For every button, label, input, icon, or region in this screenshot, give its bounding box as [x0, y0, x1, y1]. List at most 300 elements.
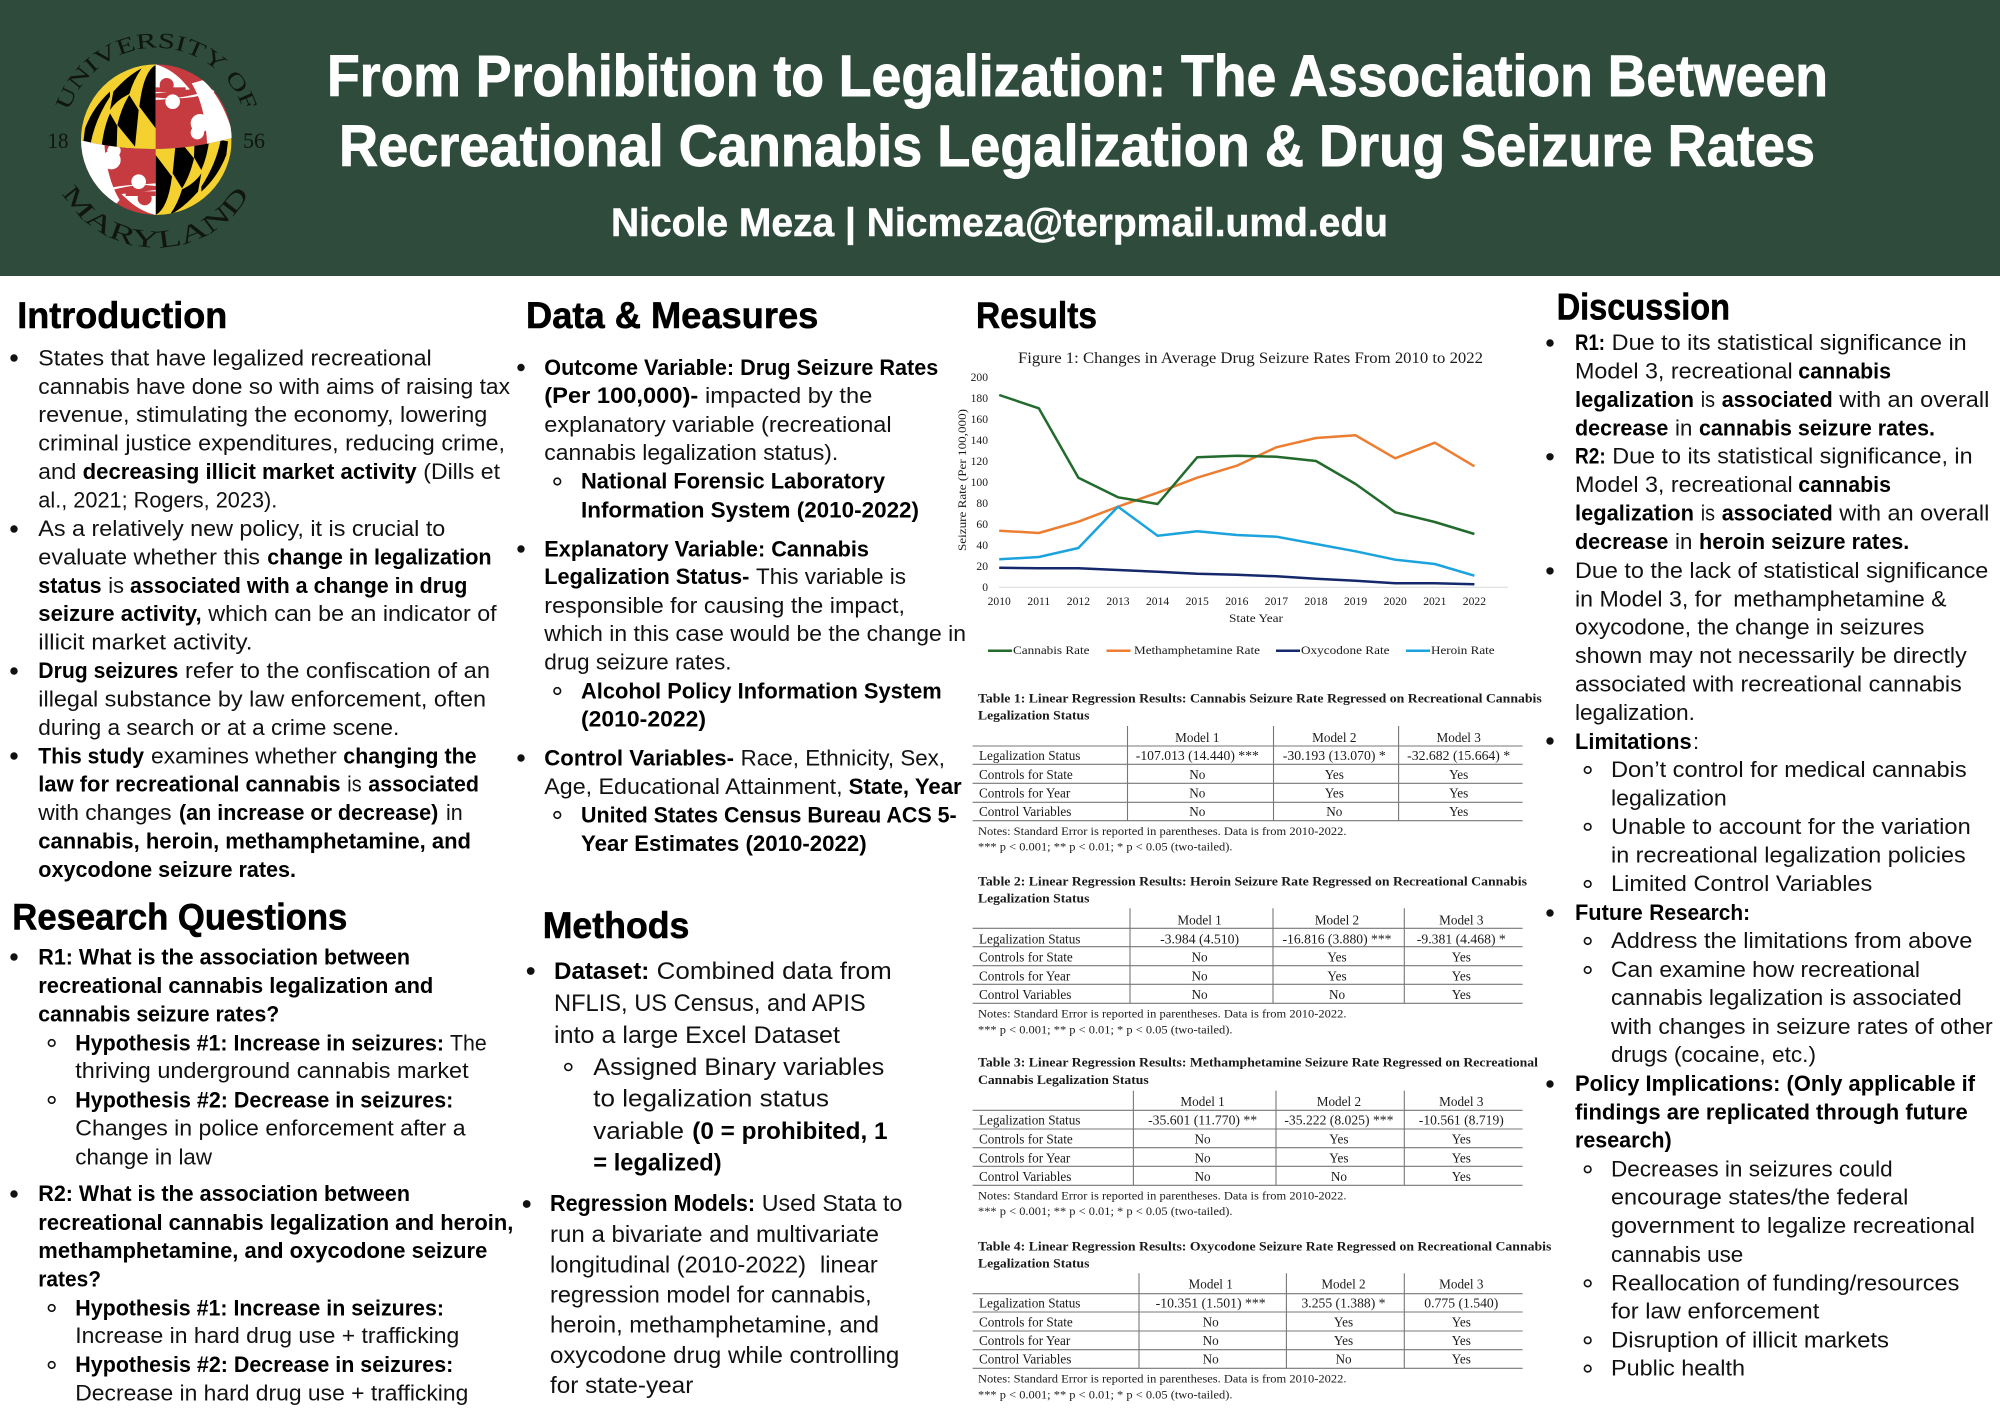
y axis labels [971, 371, 988, 594]
bullet: this study: changing the [343, 743, 477, 768]
bullet: drug seizures definition [10, 658, 490, 740]
table 2: heroin regression: Yes [1327, 969, 1347, 984]
bullet: drug seizures definition: during a search or at a crime scene. [38, 715, 399, 740]
bullet: R2 finding: in [1675, 529, 1692, 554]
bullet: R2 finding: legalization [1575, 501, 1694, 526]
table 4: oxycodone regression: Yes [1452, 1333, 1471, 1348]
line chart: Figure 1 [955, 350, 1508, 657]
bullet: R2 finding: heroin seizure rates. [1699, 529, 1909, 554]
question: R2: Hypothesis #1: Increase in seizures: [75, 1295, 444, 1320]
bullet: outcome variable: National Forensic Laboratory [581, 469, 886, 494]
y axis title: Seizure Rate (Per 100,000) [955, 409, 969, 551]
table 4: oxycodone regression: No [1203, 1314, 1219, 1329]
x axis labels: 2022 [1463, 595, 1486, 608]
bullet: dataset: Combined data from [657, 958, 892, 985]
bullet: non-significant results: oxycodone, the change in seizures [1575, 615, 1924, 640]
bullet: policy implications: research) [1575, 1127, 1672, 1152]
question: R1: Hypothesis #1: Increase in seizures: [75, 1030, 444, 1055]
x axis labels: 2019 [1344, 595, 1367, 608]
question: R1 [10, 944, 487, 1169]
bullet: future research: Future [1575, 900, 1643, 925]
legend: Cannabis Rate [1013, 643, 1090, 657]
bullet: regression models [523, 1190, 902, 1398]
panel: discussion [1546, 286, 1993, 1381]
table 2: heroin regression: Model 1 [1177, 912, 1222, 927]
bullet: policy implications: findings are replicated through future [1575, 1099, 1968, 1124]
series: heroin [999, 507, 1474, 576]
legend: Methamphetamine Rate [1134, 643, 1260, 657]
bullet: explanatory variable: responsible for causing the impact, [544, 593, 905, 618]
table 3: methamphetamine regression: Yes [1452, 1132, 1471, 1147]
bullet: R1 finding: Due to its statistical significance in [1612, 330, 1967, 355]
bullet: regression models: Used Stata to [762, 1190, 902, 1216]
bullet: R1 finding: associated [1722, 387, 1833, 412]
panel: introduction [10, 295, 510, 882]
table 2: heroin regression: Model 3 [1439, 912, 1484, 927]
table 3: methamphetamine regression: Controls for Year [979, 1151, 1071, 1166]
question: R1: change in law [75, 1144, 212, 1169]
bullet: outcome variable: Information System (2010-2022) [581, 497, 919, 522]
table 3: methamphetamine regression: No [1331, 1169, 1347, 1184]
table 1: cannabis regression: No [1189, 785, 1206, 800]
bullet: regression models: for state-year [550, 1372, 693, 1398]
question: R2: R2: What is the association between [38, 1181, 410, 1206]
bullet: dataset: NFLIS, US Census, and APIS [554, 990, 866, 1017]
bullet: legalization aims: (Dills et [423, 459, 500, 484]
bullet: control variables: United States Census Bureau ACS 5- [581, 802, 957, 827]
icon: University of Maryland seal: MARYLAND [62, 184, 246, 248]
bullet: future research: cannabis legalization is associated [1611, 985, 1962, 1010]
bullet: future research: drugs (cocaine, etc.) [1611, 1042, 1816, 1067]
table 2: heroin regression: Notes: Standard Error is reported in parentheses. Data is from 2010-2022. [978, 1008, 1347, 1021]
table 1: cannabis regression: No [1189, 767, 1206, 782]
bullet: explanatory variable: Explanatory Variable: Cannabis [544, 536, 869, 561]
bullet: outcome variable: Outcome Variable: Drug Seizure Rates [544, 355, 938, 380]
table 2: heroin regression [973, 875, 1527, 1036]
y axis labels: 40 [976, 539, 988, 552]
bullet: R1 finding: decrease [1575, 415, 1668, 440]
bullet: non-significant results: in Model 3, for [1575, 586, 1722, 611]
table 4: oxycodone regression [973, 1239, 1552, 1401]
bullet: this study: in [446, 800, 463, 825]
table 1: cannabis regression [973, 692, 1542, 854]
bullet: regression models: longitudinal (2010-2022) [550, 1251, 806, 1277]
table 4: oxycodone regression: -10.351 (1.501) *** [1156, 1296, 1266, 1311]
panel: research questions [10, 896, 513, 1405]
table 2: heroin regression: No [1192, 987, 1208, 1002]
panel: methods [523, 905, 902, 1398]
bullet: R2 finding: Due to its statistical significance, in [1612, 444, 1973, 469]
header banner [0, 0, 2000, 276]
x axis labels: 2021 [1423, 595, 1447, 608]
bullet: policy implications: cannabis use [1611, 1242, 1743, 1267]
x axis labels: 2016 [1225, 595, 1249, 608]
bullet: control variables: State, Year [849, 774, 962, 799]
table 4: oxycodone regression: Legalization Status [979, 1296, 1080, 1311]
table 1: cannabis regression: Legalization Status [978, 708, 1090, 722]
question: R2: methamphetamine, and oxycodone seizure [38, 1238, 487, 1263]
table 1: cannabis regression: Yes [1449, 804, 1468, 819]
legend [988, 643, 1495, 657]
bullet: R2 finding: cannabis [1798, 472, 1891, 497]
bullet: outcome variable: cannabis legalization status). [544, 440, 838, 465]
bullet: explanatory variable: (2010-2022) [581, 707, 706, 732]
question: R2: Increase in hard drug use + trafficking [75, 1323, 459, 1348]
table 3: methamphetamine regression: Model 3 [1439, 1094, 1484, 1109]
bullet: limitations: Don’t control for medical cannabis [1611, 757, 1967, 782]
bullet: dataset: into a large Excel Dataset [554, 1022, 840, 1049]
question: R2: rates? [38, 1266, 101, 1291]
bullet: limitations: in recreational legalization policies [1611, 842, 1966, 867]
icon: University of Maryland seal: UNIVERSITY OF [56, 34, 257, 107]
bullet: R1 finding: with an overall [1838, 387, 1989, 412]
table 3: methamphetamine regression: *** p < 0.001; ** p < 0.01; * p < 0.05 (two-tailed). [978, 1205, 1233, 1218]
x axis labels [988, 595, 1486, 608]
table 2: heroin regression: Table 2: Linear Regression Results: Heroin Seizure Rate Regressed on Recreational Cannabis [978, 875, 1527, 889]
bullet: R1 finding: in [1675, 415, 1692, 440]
bullet: control variables: Control Variables- [544, 745, 734, 770]
bullet: why evaluate: status [38, 573, 102, 598]
bullet: control variables: Age, Educational Attainment, [544, 774, 843, 799]
bullet: why evaluate: evaluate whether this [38, 544, 260, 569]
table 3: methamphetamine regression: Model 1 [1180, 1094, 1225, 1109]
y axis labels: 100 [971, 476, 988, 489]
bullet: R2 finding: associated [1722, 501, 1833, 526]
bullet: regression models: Regression Models: [550, 1190, 755, 1216]
bullet: non-significant results: Due to the lack of statistical significance [1575, 558, 1988, 583]
bullet: policy implications: Disruption of illicit markets [1611, 1327, 1889, 1352]
table 1: cannabis regression: Controls for State [979, 767, 1073, 782]
question: R2 [10, 1181, 513, 1405]
chart title: Figure 1: Changes in Average Drug Seizure Rates From 2010 to 2022 [1018, 350, 1483, 367]
bullet: R1 finding: legalization [1575, 387, 1694, 412]
table 2: heroin regression: *** p < 0.001; ** p < 0.01; * p < 0.05 (two-tailed). [978, 1023, 1233, 1036]
title: From Prohibition to Legalization: The Association Between [327, 44, 1828, 109]
bullet: explanatory variable: This variable is [756, 564, 906, 589]
table 3: methamphetamine regression: Cannabis Legalization Status [978, 1073, 1149, 1087]
table 4: oxycodone regression: Control Variables [979, 1352, 1071, 1367]
bullet: legalization aims: al., 2021; Rogers, 2023). [38, 488, 277, 512]
table 4: oxycodone regression: Yes [1334, 1314, 1353, 1329]
table 4: oxycodone regression: Controls for State [979, 1314, 1073, 1329]
y axis labels: 180 [971, 392, 988, 405]
bullet: R2 finding: is [1701, 501, 1715, 526]
heading: Introduction: Introduction [17, 295, 227, 336]
question: R2: Hypothesis #2: Decrease in seizures: [75, 1352, 453, 1377]
bullet: dataset: variable [593, 1118, 684, 1145]
table 1: cannabis regression: Control Variables [979, 804, 1071, 819]
bullet: why evaluate: illicit market activity. [38, 630, 253, 655]
bullet: this study: law for recreational cannabis [38, 772, 341, 797]
question: R1: The [450, 1030, 487, 1055]
bullet: future research: Address the limitations from above [1611, 928, 1972, 953]
bullet: dataset: Assigned Binary variables [593, 1054, 884, 1081]
bullet: R2 finding: R2: [1575, 444, 1606, 469]
table 2: heroin regression: Yes [1327, 950, 1347, 965]
table 1: cannabis regression: Notes: Standard Error is reported in parentheses. Data is from 2010-2022. [978, 825, 1347, 838]
table 1: cannabis regression: Yes [1449, 785, 1468, 800]
bullet: this study: is [347, 772, 362, 797]
bullet: non-significant results: associated with recreational cannabis [1575, 672, 1962, 697]
legend: Heroin Rate [1431, 643, 1495, 657]
y axis labels: 60 [976, 518, 988, 531]
bullet: dataset [527, 958, 892, 1176]
bullet: explanatory variable: Legalization Status- [544, 564, 749, 589]
question: R2: recreational cannabis legalization and heroin, [38, 1210, 513, 1235]
table 2: heroin regression: Controls for State [979, 950, 1073, 965]
bullet: outcome variable: (Per 100,000)- [544, 383, 698, 408]
bullet: outcome variable: explanatory variable (recreational [544, 412, 892, 437]
bullet: non-significant results [1546, 558, 1988, 725]
table 2: heroin regression: Model 2 [1315, 912, 1359, 927]
series: oxycodone [999, 568, 1474, 584]
bullet: future research: Can examine how recreational [1611, 957, 1920, 982]
icon: University of Maryland seal: 56 [243, 128, 265, 153]
icon: University of Maryland seal [48, 34, 265, 248]
bullet: legalization aims: cannabis have done so with aims of raising tax [38, 374, 510, 399]
y axis labels: 200 [971, 371, 988, 384]
bullet: legalization aims: States that have legalized recreational [38, 345, 432, 370]
table 3: methamphetamine regression: Legalization Status [979, 1113, 1080, 1128]
bullet: limitations: legalization [1611, 785, 1727, 810]
bullet: regression models: regression model for cannabis, [550, 1281, 872, 1307]
legend: Oxycodone Rate [1301, 643, 1390, 657]
bullet: this study: oxycodone seizure rates. [38, 857, 296, 882]
table 3: methamphetamine regression: Table 3: Linear Regression Results: Methamphetamine Seizure Rate Regressed on Recreational [978, 1056, 1539, 1070]
table 1: cannabis regression: No [1326, 804, 1343, 819]
bullet: policy implications: encourage states/the federal [1611, 1185, 1908, 1210]
x axis labels: 2015 [1186, 595, 1209, 608]
question: R1: recreational cannabis legalization and [38, 973, 433, 998]
table 4: oxycodone regression: Legalization Status [978, 1256, 1090, 1270]
table 3: methamphetamine regression: Notes: Standard Error is reported in parentheses. Data is from 2010-2022. [978, 1189, 1347, 1202]
y axis labels: 0 [982, 581, 988, 594]
table 1: cannabis regression: Yes [1449, 767, 1468, 782]
bullet: legalization aims: criminal justice expenditures, reducing crime, [38, 431, 505, 456]
bullet: drug seizures definition: illegal substance by law enforcement, often [38, 686, 486, 711]
bullet: this study: This study [38, 743, 145, 768]
table 3: methamphetamine regression: Yes [1452, 1169, 1471, 1184]
bullet: R2 finding [1546, 444, 1989, 554]
table 2: heroin regression: -3.984 (4.510) [1160, 931, 1239, 946]
y axis labels: 20 [976, 560, 988, 573]
bullet: legalization aims: revenue, stimulating the economy, lowering [38, 402, 487, 427]
x axis title: State Year [1229, 611, 1283, 625]
x axis labels: 2020 [1384, 595, 1407, 608]
bullet: regression models: oxycodone drug while controlling [550, 1342, 899, 1368]
bullet: this study: (an increase or decrease) [179, 800, 438, 825]
table 3: methamphetamine regression: Yes [1452, 1151, 1471, 1166]
table 4: oxycodone regression: No [1203, 1333, 1219, 1348]
table 2: heroin regression: -16.816 (3.880) *** [1282, 931, 1392, 946]
bullet: why evaluate: associated with a change in drug [130, 573, 467, 598]
bullet: R2 finding: with an overall [1838, 501, 1989, 526]
bullet: non-significant results: shown may not necessarily be directly [1575, 643, 1967, 668]
bullet: policy implications: Public health [1611, 1356, 1745, 1381]
bullet: drug seizures definition: refer to the confiscation of an [185, 658, 490, 683]
x axis labels: 2018 [1304, 595, 1328, 608]
bullet: dataset: to legalization status [593, 1086, 829, 1112]
table 2: heroin regression: Legalization Status [978, 891, 1090, 905]
table 1: cannabis regression: -30.193 (13.070) * [1283, 748, 1386, 763]
y axis labels: 80 [976, 497, 988, 510]
heading: Discussion: Discussion [1557, 286, 1730, 328]
bullet: future research [1546, 900, 1993, 1067]
heading: Research Questions: Research Questions [12, 896, 347, 937]
bullet: policy implications: for law enforcement [1611, 1299, 1819, 1324]
table 4: oxycodone regression: Notes: Standard Error is reported in parentheses. Data is from 2010-2022. [978, 1372, 1347, 1385]
bullet: policy implications [1546, 1071, 1976, 1381]
x axis labels: 2010 [988, 595, 1011, 608]
bullet: policy implications: Reallocation of funding/resources [1611, 1270, 1959, 1295]
title [327, 44, 1828, 179]
table 3: methamphetamine regression: No [1195, 1132, 1211, 1147]
bullet: this study: with changes [37, 800, 172, 825]
table 3: methamphetamine regression: Control Variables [979, 1169, 1071, 1184]
bullet: non-significant results: legalization. [1575, 700, 1695, 725]
table 4: oxycodone regression: Model 2 [1321, 1276, 1366, 1291]
table 4: oxycodone regression: Yes [1452, 1314, 1471, 1329]
heading: Methods: Methods [543, 905, 689, 946]
bullet: regression models: heroin, methamphetamine, and [550, 1311, 879, 1337]
question: R1: R1: What is the association between [38, 944, 410, 970]
title: Recreational Cannabis Legalization & Drug Seizure Rates [339, 114, 1815, 179]
bullet: limitations: Limited Control Variables [1611, 871, 1872, 896]
table 4: oxycodone regression: *** p < 0.001; ** p < 0.01; * p < 0.05 (two-tailed). [978, 1388, 1233, 1401]
table 3: methamphetamine regression: -35.601 (11.770) ** [1148, 1113, 1257, 1128]
bullet: control variables: Year Estimates (2010-2022) [581, 831, 867, 856]
bullet: explanatory variable: drug seizure rates. [544, 650, 732, 675]
table 4: oxycodone regression: Table 4: Linear Regression Results: Oxycodone Seizure Rate Regressed on Recreational Cannabis [978, 1239, 1552, 1253]
table 1: cannabis regression: Model 2 [1312, 730, 1356, 745]
table 1: cannabis regression: -107.013 (14.440) *** [1136, 748, 1259, 763]
bullet: non-significant results: methamphetamine & [1733, 586, 1947, 611]
bullet: policy implications: Policy Implications: (Only applicable if [1575, 1071, 1976, 1096]
bullet: future research: Research: [1649, 900, 1750, 925]
bullet: R2 finding: Model 3, recreational [1575, 472, 1793, 497]
series: methamphetamine [999, 435, 1474, 533]
bullet: legalization aims: decreasing illicit market activity [83, 459, 417, 484]
table 4: oxycodone regression: 0.775 (1.540) [1424, 1296, 1498, 1311]
bullet: explanatory variable: Alcohol Policy Information System [581, 678, 942, 703]
bullet: R1 finding [1546, 330, 1989, 440]
table 2: heroin regression: Yes [1452, 950, 1471, 965]
bullet: explanatory variable: which in this case would be the change in [543, 621, 966, 646]
table 1: cannabis regression: Legalization Status [979, 748, 1080, 763]
table 1: cannabis regression: Controls for Year [979, 785, 1071, 800]
table 2: heroin regression: No [1329, 987, 1345, 1002]
table 4: oxycodone regression: Yes [1334, 1333, 1353, 1348]
bullet: why evaluate: which can be an indicator of [207, 601, 498, 626]
x axis labels: 2011 [1027, 595, 1050, 608]
bullet: legalization aims [10, 345, 510, 512]
question: R2: Decrease in hard drug use + trafficking [75, 1380, 468, 1405]
author and email: Nicole Meza | Nicmeza@terpmail.umd.edu [611, 201, 1388, 245]
bullet: why evaluate: As a relatively new policy, it is crucial to [38, 516, 445, 541]
table 1: cannabis regression: Table 1: Linear Regression Results: Cannabis Seizure Rate Regressed on Recreational Cannabis [978, 692, 1542, 706]
table 4: oxycodone regression: Yes [1452, 1352, 1471, 1367]
x axis labels: 2013 [1106, 595, 1130, 608]
table 1: cannabis regression: No [1189, 804, 1206, 819]
bullet: policy implications: Decreases in seizures could [1611, 1156, 1893, 1181]
table 1: cannabis regression: *** p < 0.001; ** p < 0.01; * p < 0.05 (two-tailed). [978, 841, 1233, 854]
bullet: outcome variable: impacted by the [705, 383, 872, 408]
bullet: R1 finding: R1: [1575, 330, 1605, 355]
bullet: why evaluate [10, 516, 498, 655]
table 2: heroin regression: Yes [1452, 969, 1471, 984]
bullet: drug seizures definition: Drug seizures [38, 658, 178, 683]
table 2: heroin regression: No [1192, 969, 1208, 984]
table 1: cannabis regression: -32.682 (15.664) * [1407, 748, 1510, 763]
bullet: limitations: Limitations [1575, 729, 1692, 754]
bullet: dataset: = legalized) [593, 1150, 722, 1176]
table 3: methamphetamine regression: -10.561 (8.719) [1419, 1113, 1504, 1128]
question: R1: Changes in police enforcement after a [75, 1115, 466, 1140]
table 1: cannabis regression: Model 3 [1437, 730, 1481, 745]
panel: results [955, 295, 1552, 1401]
panel: data and measures [517, 295, 966, 856]
bullet: R1 finding: Model 3, recreational [1575, 358, 1793, 383]
table 1: cannabis regression: Yes [1325, 785, 1344, 800]
table 3: methamphetamine regression: -35.222 (8.025) *** [1284, 1113, 1393, 1128]
bullet: this study [10, 743, 479, 882]
table 4: oxycodone regression: Model 3 [1439, 1276, 1484, 1291]
bullet: future research: with changes in seizure rates of other [1610, 1014, 1993, 1039]
bullet: R1 finding: cannabis seizure rates. [1699, 415, 1935, 440]
y axis labels: 160 [971, 413, 988, 426]
table 4: oxycodone regression: No [1335, 1352, 1352, 1367]
bullet: limitations: : [1693, 729, 1699, 754]
question: R1: thriving underground cannabis market [75, 1058, 469, 1083]
icon: University of Maryland seal: 18 [48, 128, 68, 153]
bullet: dataset: Dataset: [554, 958, 649, 985]
bullet: dataset: (0 = prohibited, 1 [692, 1118, 888, 1145]
bullet: regression models: run a bivariate and multivariate [550, 1221, 879, 1247]
x axis labels: 2012 [1067, 595, 1090, 608]
y axis labels: 140 [971, 434, 988, 447]
table 3: methamphetamine regression: No [1195, 1169, 1211, 1184]
bullet: R2 finding: decrease [1575, 529, 1668, 554]
table 3: methamphetamine regression: Controls for State [979, 1132, 1073, 1147]
table 2: heroin regression: No [1192, 950, 1208, 965]
bullet: why evaluate: change in legalization [267, 544, 492, 569]
bullet: control variables: Race, Ethnicity, Sex, [741, 745, 945, 770]
bullet: legalization aims: and [38, 459, 76, 484]
table 3: methamphetamine regression: Yes [1329, 1151, 1349, 1166]
x axis labels: 2017 [1265, 595, 1288, 608]
table 2: heroin regression: Legalization Status [979, 931, 1080, 946]
bullet: why evaluate: is [108, 573, 124, 598]
table 3: methamphetamine regression: Yes [1329, 1132, 1349, 1147]
table 3: methamphetamine regression [973, 1056, 1539, 1218]
bullet: this study: associated [368, 772, 479, 797]
bullet: this study: cannabis, heroin, methamphetamine, and [38, 829, 471, 854]
bullet: policy implications: government to legalize recreational [1611, 1213, 1975, 1238]
table 3: methamphetamine regression: No [1195, 1151, 1211, 1166]
bullet: this study: examines whether [151, 743, 337, 768]
table 1: cannabis regression: Model 1 [1175, 730, 1219, 745]
question: R1: Hypothesis #2: Decrease in seizures: [75, 1088, 453, 1112]
table 4: oxycodone regression: Controls for Year [979, 1333, 1071, 1348]
heading: Data & Measures: Data & Measures [526, 295, 818, 336]
table 2: heroin regression: Controls for Year [979, 969, 1071, 984]
table 2: heroin regression: Control Variables [979, 987, 1071, 1002]
question: R1: cannabis seizure rates? [38, 1001, 279, 1026]
table 2: heroin regression: Yes [1452, 987, 1471, 1002]
bullet: control variables [517, 745, 962, 856]
table 1: cannabis regression: Yes [1325, 767, 1344, 782]
heading: Results: Results [976, 295, 1097, 336]
